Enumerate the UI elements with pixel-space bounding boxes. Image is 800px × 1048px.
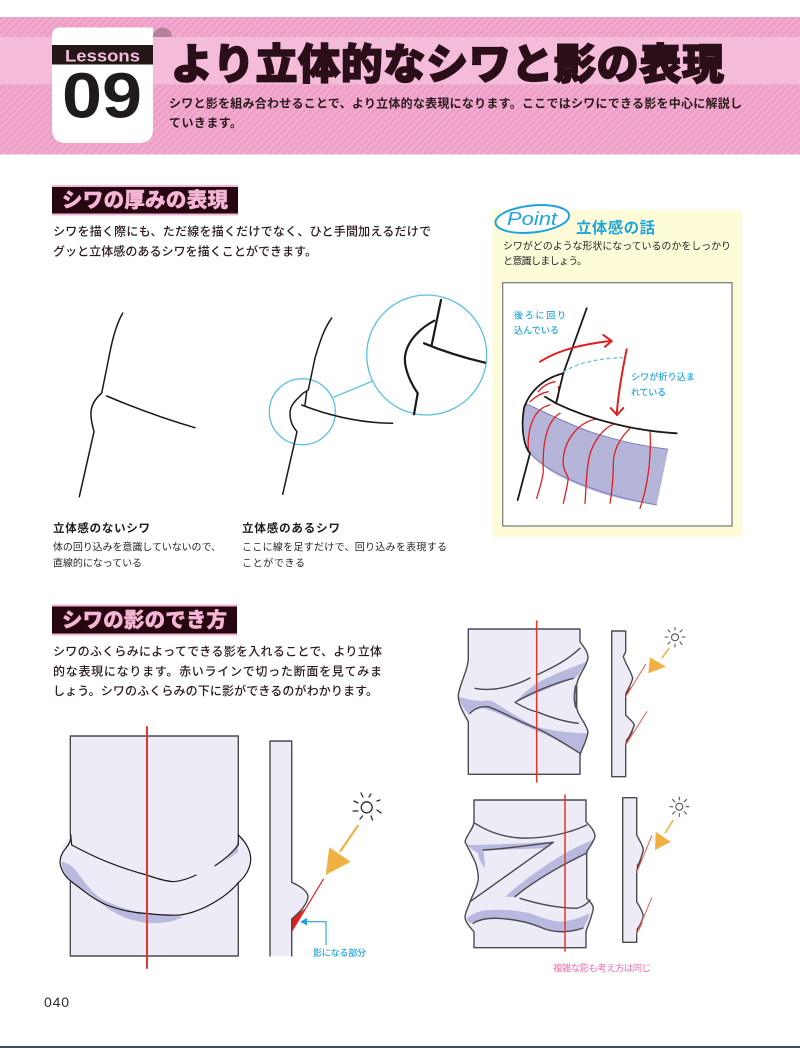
light arrow [326, 825, 358, 875]
section heading: thickness [52, 185, 238, 216]
caption: complex shadows: 複雑な影も考え方は同じ [553, 962, 651, 974]
caption: flat wrinkle: 立体感のないシワ [53, 521, 150, 535]
shadow callout: 影になる部分 [313, 947, 366, 958]
point text [503, 240, 731, 268]
lesson badge: Lessons [65, 46, 140, 66]
drawing: flat wrinkle [79, 313, 195, 497]
title: より立体的なシワと影の表現 [171, 41, 724, 88]
red section line [146, 727, 148, 968]
shadow fold [524, 403, 668, 505]
red contour lines [528, 382, 650, 508]
caption: wrinkle with depth: ことができる [242, 556, 305, 570]
shadow [62, 862, 183, 923]
icon: sun [670, 797, 689, 816]
light arrow [655, 820, 673, 850]
point badge [494, 202, 571, 236]
body text: shadow: しょう。シワのふくらみの下に影ができるのがわかります。 [53, 683, 378, 698]
annotations [514, 310, 695, 398]
red section line [564, 795, 566, 951]
section heading: shadow [52, 604, 237, 636]
body text: thickness: グッと立体感のあるシワを描くことができます。 [53, 244, 317, 258]
body text: shadow [53, 644, 382, 698]
caption: wrinkle with depth [242, 521, 447, 570]
shadow bands [467, 842, 553, 868]
section heading: shadow: シワの影のでき方 [62, 608, 227, 632]
dashed hidden line [563, 358, 623, 372]
body text: shadow: 的な表現になります。赤いラインで切った断面を見てみま [53, 664, 382, 678]
annotations: シワが折り込ま [631, 371, 695, 382]
diagram box [503, 283, 732, 526]
page number: 040 [44, 994, 69, 1010]
point text: シワがどのような形状になっているのかをしっかり [503, 240, 731, 252]
lesson badge [52, 28, 172, 143]
annotations: れている [631, 388, 666, 398]
intro text: ていきます。 [169, 116, 242, 130]
diagram: single wrinkle front [60, 727, 251, 968]
caption: wrinkle with depth: ここに線を足すだけで、回り込みを表現する [242, 540, 447, 554]
diagram: crossing wrinkles front [458, 621, 588, 782]
body text: shadow: シワのふくらみによってできる影を入れることで、より立体 [53, 644, 382, 658]
icon: sun [665, 628, 685, 647]
body text: thickness: シワを描く際にも、ただ線を描くだけでなく、ひと手間加えるだけで [53, 224, 431, 238]
red section line [536, 621, 538, 782]
diagram: single wrinkle section [270, 741, 381, 958]
point heading: 立体感の話 [576, 218, 655, 237]
red arrows [540, 335, 627, 415]
diagram: Z wrinkles section [623, 797, 689, 942]
annotations: 込んでいる [514, 326, 559, 336]
caption: wrinkle with depth: 立体感のあるシワ [242, 521, 340, 535]
point text: と意識しましょう。 [503, 256, 587, 268]
black outlines [518, 308, 677, 500]
caption: flat wrinkle [53, 521, 221, 570]
intro text [169, 96, 742, 130]
icon: sun [353, 793, 381, 820]
caption: flat wrinkle: 直線的になっている [53, 556, 142, 570]
drawing: wrinkle with depth and magnifier [269, 295, 487, 494]
panel: point [492, 202, 742, 537]
point badge: Point [507, 209, 558, 229]
header banner [0, 17, 800, 154]
diagram: Z wrinkles front [465, 795, 595, 951]
light arrow [648, 648, 669, 673]
body text: thickness [53, 224, 431, 258]
section heading: thickness: シワの厚みの表現 [62, 189, 228, 212]
footer rule [0, 1046, 800, 1048]
intro text: シワと影を組み合わせることで、より立体的な表現になります。ここではシワにできる影を中心に解説し [169, 96, 742, 110]
annotations: 後ろに回り [514, 310, 566, 320]
shadow callout [300, 918, 366, 958]
diagram: crossing wrinkles section [612, 628, 685, 777]
caption: flat wrinkle: 体の回り込みを意識していないので、 [53, 542, 221, 554]
shadow bands [515, 662, 587, 702]
lesson badge: 09 [62, 60, 142, 132]
